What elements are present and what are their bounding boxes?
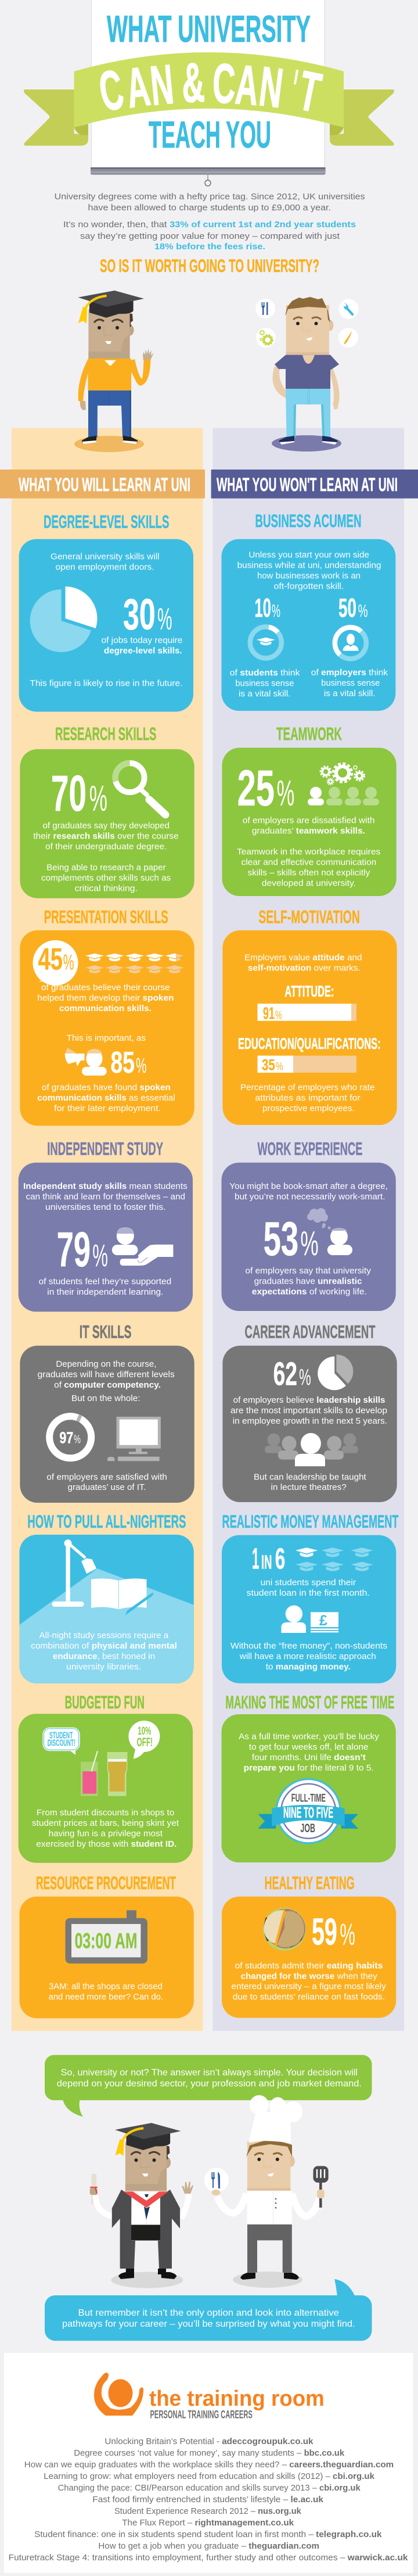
bar: education 35%: % (276, 1061, 283, 1073)
icon: digital clock 03:00 AM: 03:00 AM (75, 1929, 138, 1953)
column background: won't learn (212, 428, 404, 2031)
donut 97%: 97 (59, 1428, 73, 1446)
panel: career advancement: are the most important skills to develop (230, 1406, 387, 1416)
panel: business acumen: is a vital skill. (239, 689, 290, 698)
stat 53%: % (300, 1224, 319, 1263)
character: graduate in gown (90, 2123, 193, 2288)
bar: attitude 91%: % (275, 1009, 282, 1022)
bar: attitude 91% (258, 1004, 356, 1023)
speech bubble 45%: 45 (38, 942, 63, 976)
ribbon title: can and can't: A (233, 53, 261, 117)
icon: person and banknote: £ (319, 1613, 327, 1629)
speech bubble 45%: % (63, 950, 74, 974)
heading: RESEARCH SKILLS (55, 723, 157, 744)
panel: teamwork (222, 723, 397, 896)
callout: alternative pathways: But remember it isn’t the only option and look into alternative (78, 2308, 339, 2318)
panel: degree-level skills (19, 511, 193, 712)
panel: research skills: their research skills over the course (33, 831, 179, 841)
source list: Changing the pace: CBI/Pearson education and skills survey 2013 – cbi.org.uk (58, 2483, 361, 2493)
panel: work experience: graduates have unrealistic (254, 1277, 362, 1287)
heading: HOW TO PULL ALL-NIGHTERS (27, 1511, 186, 1532)
icon: wrench (339, 299, 359, 319)
stat 59%: % (340, 1918, 355, 1952)
pie chart 30% (30, 586, 97, 652)
source list: Learning to grow: what employers need from education and skills (2012) – cbi.org.uk (44, 2471, 375, 2481)
heading: RESOURCE PROCUREMENT (36, 1872, 176, 1893)
stat 10%: % (272, 601, 280, 621)
panel: degree-level skills: degree-level skills. (104, 646, 182, 656)
panel: realistic money management: will have a more realistic approach (239, 1651, 376, 1661)
panel: teamwork: developed at university. (262, 879, 356, 888)
panel: resource procurement: 3AM: all the shops are closed (49, 1982, 163, 1991)
icon: person and banknote (281, 1606, 338, 1633)
panel: research skills: complements other skills such as (41, 873, 171, 883)
column background: learn (12, 428, 203, 2031)
panel: presentation skills: communication skills as essential (37, 1093, 175, 1103)
heading: DEGREE-LEVEL SKILLS (44, 511, 170, 532)
panel: healthy eating: due to students’ reliance on fast foods. (233, 1992, 385, 2002)
donut 50% with employer (335, 628, 366, 659)
panel: teamwork: clear and effective communication (242, 858, 376, 868)
panel: healthy eating: changed for the worse when they (241, 1971, 377, 1981)
panel: work experience: expectations of working life. (252, 1287, 367, 1297)
panel: presentation skills: This is important, as (67, 1033, 146, 1043)
panel: work experience: You might be book-smart after a degree, (229, 1181, 388, 1191)
panel: realistic money management: to managing money. (266, 1662, 351, 1672)
heading: PRESENTATION SKILLS (44, 906, 168, 927)
donut 97% (49, 1416, 91, 1458)
panel: presentation skills (20, 906, 194, 1126)
panel: career advancement (222, 1321, 397, 1502)
icon: carrot (338, 328, 358, 347)
panel: budgeted fun: exercised by those with student ID. (36, 1839, 176, 1849)
speech bubble: 10% off: 10% (138, 1725, 151, 1737)
stat 25%: % (277, 773, 294, 814)
panel: career advancement: of employers believe leadership skills (233, 1395, 385, 1405)
panel: research skills: of their undergraduate degree. (45, 841, 167, 851)
chef hair (246, 2141, 292, 2157)
panel: degree-level skills: This figure is likely to rise in the future. (30, 679, 182, 689)
panel: IT skills: graduates will have different levels (38, 1370, 175, 1380)
panel: presentation skills: communication skills. (59, 1004, 152, 1013)
panel: realistic money management: student loan in the first month. (247, 1588, 370, 1598)
panel: making the most of free time: prepare you for the literal 9 to 5. (244, 1763, 374, 1773)
panel: business acumen: business sense (321, 678, 380, 688)
panel: resource procurement: and need more beer? Can do. (49, 1992, 163, 2002)
speech bubble: 10% off (128, 1721, 160, 1759)
panel: business acumen: oft-forgotten skill. (274, 582, 344, 592)
heading: HEALTHY EATING (265, 1872, 355, 1893)
speech bubble: 10% off: OFF! (137, 1736, 153, 1749)
stat 1 in 6: 1 (252, 1542, 259, 1575)
panel: how to pull all-nighters: All-night study sessions require a (39, 1631, 169, 1640)
header banner with title (24, 0, 394, 186)
panel: career advancement: But can leadership be taught (254, 1472, 367, 1482)
source list: Fast food firmly entrenched in students’ lifestyle – le.ac.uk (92, 2495, 324, 2505)
icon: four people, one highlighted (308, 787, 379, 805)
panel: presentation skills: of graduates believe their course (41, 983, 170, 993)
stat 70%: % (89, 779, 107, 819)
column banner: what you will learn (0, 470, 205, 499)
panel: career advancement: in employee growth in the next 5 years. (233, 1416, 387, 1426)
stat 50%: 50 (338, 593, 356, 623)
callout: alternative pathways (45, 2279, 372, 2341)
heading: BUDGETED FUN (65, 1692, 145, 1712)
bar: education 35% (258, 1056, 356, 1074)
panel: business acumen: Unless you start your own side (248, 550, 369, 560)
panel: degree-level skills: General university skills will (51, 551, 160, 561)
stat 85%: % (136, 1054, 146, 1077)
panel: realistic money management: Without the “free money”, non-students (230, 1641, 387, 1651)
ribbon title: can and can't: N (147, 52, 176, 117)
source list: Student Experience Research 2012 – nus.org.uk (114, 2506, 301, 2516)
panel: healthy eating: entered university – a figure most likely (231, 1982, 386, 1991)
panel: business acumen: is a vital skill. (324, 689, 375, 698)
intro text: have been allowed to charge students up to £9,000 a year. (88, 203, 331, 213)
panel: research skills: critical thinking. (75, 883, 138, 893)
panel: self-motivation: attributes as important for (255, 1093, 361, 1103)
panel: teamwork: graduates’ teamwork skills. (252, 826, 365, 836)
panel: business acumen (222, 510, 395, 711)
panel: research skills (20, 723, 194, 898)
callout: university or not (45, 2055, 372, 2117)
icon: team with leader (265, 1433, 358, 1466)
icon: open book and pen (91, 1578, 153, 1614)
bar: education 35%: 35 (262, 1056, 275, 1074)
badge: nine to five job (258, 1779, 358, 1843)
intro text: say they’re getting poor value for money – compared with just (80, 231, 340, 241)
panel: self-motivation: self-motivation over marks. (248, 963, 361, 973)
icon: gears (256, 328, 276, 347)
panel: degree-level skills: open employment doors. (56, 562, 154, 572)
panel: IT skills: But on the whole: (71, 1393, 140, 1403)
speech bubble: student discount (43, 1728, 80, 1755)
source list (9, 2437, 408, 2563)
pull-down screen panel (92, 0, 325, 167)
icon: desk lamp (52, 1539, 96, 1607)
chef hat (248, 2095, 302, 2144)
logo: the training room: PERSONAL TRAINING CAREERS (150, 2409, 253, 2421)
source list: Futuretrack Stage 4: transitions into employment, further study and other outcomes – warwick.ac.uk (9, 2553, 408, 2563)
panel: independent study: in their independent learning. (47, 1287, 163, 1297)
panel: budgeted fun: having fun is a privilege most (49, 1829, 163, 1839)
icon: digital clock 03:00 AM (65, 1910, 147, 1964)
panel: independent study (19, 1138, 193, 1312)
stat 30%: 30 (123, 590, 156, 639)
panel: teamwork: Teamwork in the workplace requires (237, 847, 380, 857)
icon: magnifier (116, 763, 165, 815)
stat 1 in 6 (252, 1542, 285, 1575)
panel: work experience: of employers say that university (245, 1266, 372, 1276)
panel: research skills: of graduates say they developed (43, 821, 170, 830)
panel: work experience (222, 1138, 396, 1311)
panel: how to pull all-nighters: combination of physical and mental (31, 1641, 177, 1651)
panel: business acumen: of students think (230, 668, 300, 678)
roller bar (91, 167, 326, 175)
source list: How to get a job when you graduate – theguardian.com (98, 2541, 319, 2551)
logo: the training room (94, 2373, 325, 2421)
panel: making the most of free time: four months. Uni life doesn’t (252, 1753, 366, 1762)
stat 70%: 70 (51, 765, 87, 822)
stat 10%: 10 (254, 593, 271, 623)
stat 62%: 62 (273, 1355, 297, 1392)
panel: business acumen: business sense (235, 678, 294, 688)
ribbon title: can and can't (94, 51, 326, 124)
panel: budgeted fun: student prices at bars, being skint yet (32, 1818, 179, 1828)
panel: presentation skills: helped them develop their spoken (37, 993, 174, 1003)
pie chart 62% (318, 1355, 353, 1390)
panel: self-motivation (222, 906, 397, 1125)
panel: teamwork: skills – skills often not explicitly (247, 868, 370, 878)
logo: the training room: the training room (149, 2387, 325, 2411)
ribbon title: can and can't: A (122, 54, 153, 120)
donut 97%: % (74, 1433, 81, 1446)
panel: independent study: universities tend to foster this. (45, 1202, 166, 1212)
icon row: graduate caps (85, 954, 184, 973)
stat 53%: 53 (264, 1212, 298, 1266)
stat 25%: 25 (237, 760, 275, 816)
intro text (55, 192, 365, 252)
pull cord (205, 175, 211, 186)
stat 85%: 85 (110, 1046, 135, 1080)
icon: thinking person (307, 1208, 352, 1255)
panel: presentation skills: for their later employment. (54, 1104, 161, 1113)
ribbon title: can and can't: & (181, 51, 206, 114)
panel: how to pull all-nighters: university libraries. (66, 1662, 141, 1672)
callout: university or not: depend on your desired sector, your profession and job market demand. (57, 2079, 362, 2088)
ribbon title: can and can't: N (256, 55, 286, 120)
panel: realistic money management (222, 1511, 398, 1683)
diploma hand (90, 2174, 98, 2204)
badge: nine to five job: FULL-TIME (291, 1793, 326, 1805)
panel: resource procurement (20, 1872, 194, 2018)
icon: spatula (314, 2166, 329, 2208)
source list: Unlocking Britain’s Potential - adeccogroupuk.co.uk (105, 2437, 314, 2446)
panel: career advancement: in lecture theatres? (271, 1482, 347, 1492)
badge: nine to five job: NINE TO FIVE (283, 1804, 333, 1821)
panel: making the most of free time: As a full time worker, you’ll be lucky (239, 1732, 379, 1742)
heading: IT SKILLS (80, 1321, 131, 1342)
panel: research skills: Being able to research a paper (46, 862, 166, 872)
panel: IT skills (20, 1321, 194, 1503)
badge: nine to five job: JOB (300, 1822, 315, 1835)
panel: independent study: of students feel they’re supported (39, 1277, 171, 1287)
speech bubble: student discount: STUDENT (49, 1731, 73, 1741)
stat 59%: 59 (312, 1911, 337, 1953)
intro text: 18% before the fees rise. (154, 242, 265, 252)
panel: healthy eating (222, 1872, 396, 2018)
panel: IT skills: of employers are satisfied with (46, 1472, 167, 1482)
ribbon (24, 51, 394, 146)
ribbon title: can and can't: T (294, 59, 326, 124)
stat 1 in 6: 6 (275, 1542, 285, 1575)
source list: Student finance: one in six students spend student loan in first month – telegraph.co.uk (34, 2530, 382, 2539)
source list: How can we equip graduates with the workplace skills they need? – careers.theguardian.com (24, 2460, 394, 2470)
panel: budgeted fun (19, 1692, 193, 1863)
panel: realistic money management: uni students spend their (261, 1578, 356, 1588)
panel: teamwork: of employers are dissatisfied with (243, 816, 375, 826)
panel: self-motivation: Employers value attitude and (244, 952, 362, 962)
character: non-student (255, 297, 359, 452)
panel: self-motivation: Percentage of employers who rate (240, 1083, 375, 1092)
ribbon title: can and can't: C (94, 57, 128, 123)
panel: IT skills: Depending on the course, (56, 1359, 157, 1369)
panel: footer (4, 2353, 413, 2573)
icon: gears (320, 764, 365, 784)
heading: TEAMWORK (276, 723, 342, 744)
character: graduate student (74, 291, 154, 452)
ribbon title: can and can't: C (212, 52, 236, 115)
panel: making the most of free time: to get four weeks off, let alone (249, 1742, 368, 1752)
panel: business acumen: of employers think (311, 668, 388, 678)
character: chef (204, 2095, 329, 2288)
icon row: six caps (296, 1547, 373, 1571)
panel: IT skills: graduates’ use of IT. (68, 1482, 146, 1492)
callout: university or not: So, university or not? The answer isn’t always simple. Your decision will (61, 2068, 358, 2077)
source list: The Flux Report – rightmanagement.co.uk (122, 2518, 294, 2528)
panel: degree-level skills: of jobs today require (101, 636, 182, 646)
panel: IT skills: of computer competency. (54, 1380, 161, 1390)
icon: plate with cutlery (204, 2168, 229, 2195)
stat 79%: 79 (57, 1222, 91, 1277)
icon: drinks (81, 1751, 128, 1796)
speech bubble 45% (33, 940, 78, 986)
stat 62%: % (299, 1365, 311, 1390)
ribbon title: can and can't: ' (287, 59, 301, 121)
lamp light beam (20, 1568, 194, 1683)
donut 10% with graduate cap (250, 627, 282, 658)
panel: business acumen: how businesses work is an (257, 571, 361, 581)
heading: INDEPENDENT STUDY (47, 1138, 163, 1159)
source list: Degree courses ‘not value for money’, say many students – bbc.co.uk (74, 2448, 345, 2458)
panel: making the most of free time (222, 1692, 396, 1862)
column banner: what you will learn: WHAT YOU WILL LEARN AT UNI (19, 474, 190, 495)
stat 30%: % (157, 602, 172, 636)
icon: burger (263, 1908, 306, 1951)
icon: supported person on hand (112, 1227, 173, 1266)
icon: cutlery (255, 299, 275, 318)
intro text: University degrees come with a hefty price tag. Since 2012, UK universities (55, 192, 365, 202)
icon: megaphone person (65, 1048, 107, 1076)
icon: computer (107, 1417, 161, 1461)
panel: healthy eating: of students admit their eating habits (235, 1961, 383, 1970)
panel: independent study: Independent study skills mean students (23, 1181, 188, 1191)
callout: alternative pathways: pathways for your career – you’ll be surprised by what you might find. (62, 2319, 355, 2329)
panel: business acumen: business while at uni, understanding (237, 561, 381, 571)
panel: self-motivation: prospective employees. (262, 1104, 355, 1113)
title line three: TEACH YOU (149, 113, 271, 156)
speech bubble: student discount: DISCOUNT! (48, 1738, 75, 1748)
panel: how to pull all-nighters: endurance, best honed in (53, 1651, 155, 1661)
panel: work experience: but you’re not necessarily work-smart. (235, 1192, 385, 1202)
bar: attitude 91%: 91 (263, 1004, 275, 1023)
panel: presentation skills: of graduates have found spoken (42, 1083, 171, 1092)
panel: self-motivation: ATTITUDE: (284, 983, 334, 1000)
intro text: It’s no wonder, then, that 33% of current 1st and 2nd year students (63, 220, 356, 230)
stat 79%: % (92, 1238, 108, 1273)
panel: how to pull all-nighters (20, 1511, 194, 1683)
panel: budgeted fun: From student discounts in shops to (37, 1808, 174, 1818)
stat 1 in 6: IN (261, 1551, 272, 1572)
panel: independent study: can think and learn for themselves – and (26, 1192, 185, 1202)
stat 50%: % (358, 601, 368, 621)
